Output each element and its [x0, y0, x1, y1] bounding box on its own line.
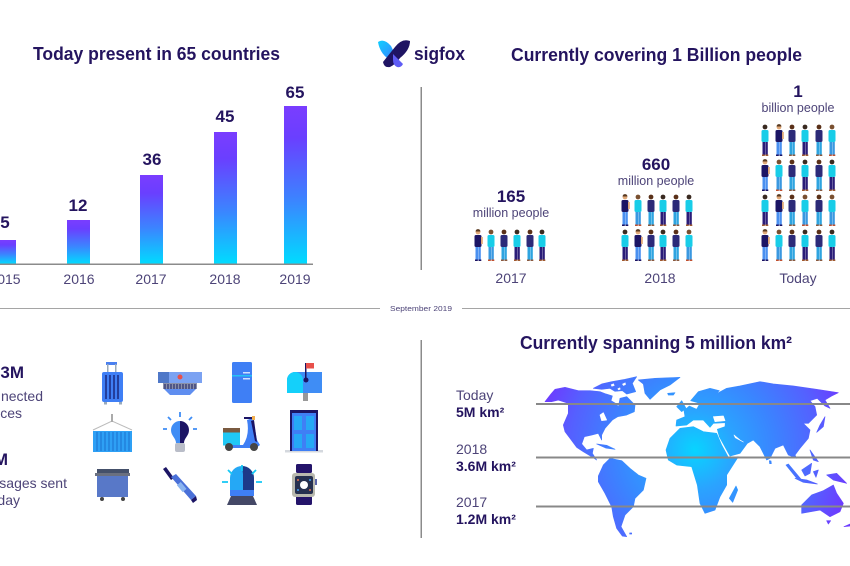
label: today [456, 387, 505, 420]
bar 2015: 5 [0, 213, 10, 232]
bar 2017 [135, 150, 167, 287]
stat: messages per day [0, 450, 67, 508]
icon: smart watch [292, 464, 317, 505]
panel: device stats [0, 363, 67, 508]
eurasia africa and oceania [666, 382, 850, 527]
column 2017: million people [473, 206, 549, 220]
label: 2017: 1.2M km² [456, 511, 516, 527]
bar 2017: 2017 [135, 271, 167, 287]
bar 2015 [0, 213, 21, 287]
icon: siren [222, 465, 262, 505]
icon: smoke detector [158, 372, 202, 395]
label: today: Today [456, 387, 493, 403]
column today: billion people [762, 101, 835, 115]
icon: light bulb [163, 412, 197, 452]
label: 2017 [456, 494, 516, 527]
bar 2019: 2019 [279, 271, 311, 287]
column 2018 [618, 155, 694, 286]
column 2017 [473, 187, 549, 286]
date label: September 2019 [390, 304, 452, 313]
logo: sigfox: sigfox [414, 44, 465, 64]
panel: people covered [473, 45, 836, 286]
heading: countries: Today present in 65 countries [33, 44, 280, 64]
americas and greenland [545, 377, 680, 537]
icon: mailbox [287, 363, 322, 401]
column today [762, 82, 836, 286]
bar 2019: 65 [286, 83, 304, 102]
icon: door [285, 410, 323, 452]
bar 2019 [279, 83, 311, 287]
label: 2017: 2017 [456, 494, 487, 510]
bar 2016: 12 [69, 196, 87, 215]
panel: area coverage map [456, 333, 850, 537]
label: 2018 [456, 441, 516, 474]
column 2018: 2018 [644, 270, 676, 286]
column 2018: million people [618, 174, 694, 188]
icon: thermometer [163, 467, 197, 503]
bar 2016 [63, 196, 95, 287]
label: today: 5M km² [456, 404, 505, 420]
heading: map: Currently spanning 5 million km² [520, 333, 792, 353]
logo: sigfox [378, 40, 465, 67]
column today: 1 [793, 82, 803, 101]
column 2018: 660 [642, 155, 670, 174]
bar 2017: 36 [143, 150, 161, 169]
icon: dumpster [95, 469, 130, 501]
column 2017: 2017 [495, 270, 527, 286]
bar 2016: 2016 [63, 271, 95, 287]
world map [545, 377, 850, 537]
heading: people: Currently covering 1 Billion people [511, 45, 802, 65]
bar 2018: 45 [216, 107, 234, 126]
panel: countries bar chart [0, 44, 313, 287]
icon: suitcase [102, 362, 123, 404]
stat: connected devices [0, 363, 43, 421]
label: 2018: 3.6M km² [456, 458, 516, 474]
column 2017: 165 [497, 187, 525, 206]
bar 2018: 2018 [209, 271, 241, 287]
icon: fridge [232, 362, 252, 403]
column today: Today [779, 270, 817, 286]
stat: connected devices: 3M [0, 363, 24, 382]
panel: device icons [93, 362, 323, 505]
icon: scooter [223, 416, 260, 451]
icon: shipping container [93, 414, 132, 452]
label: 2018: 2018 [456, 441, 487, 457]
bar 2018 [209, 107, 241, 287]
